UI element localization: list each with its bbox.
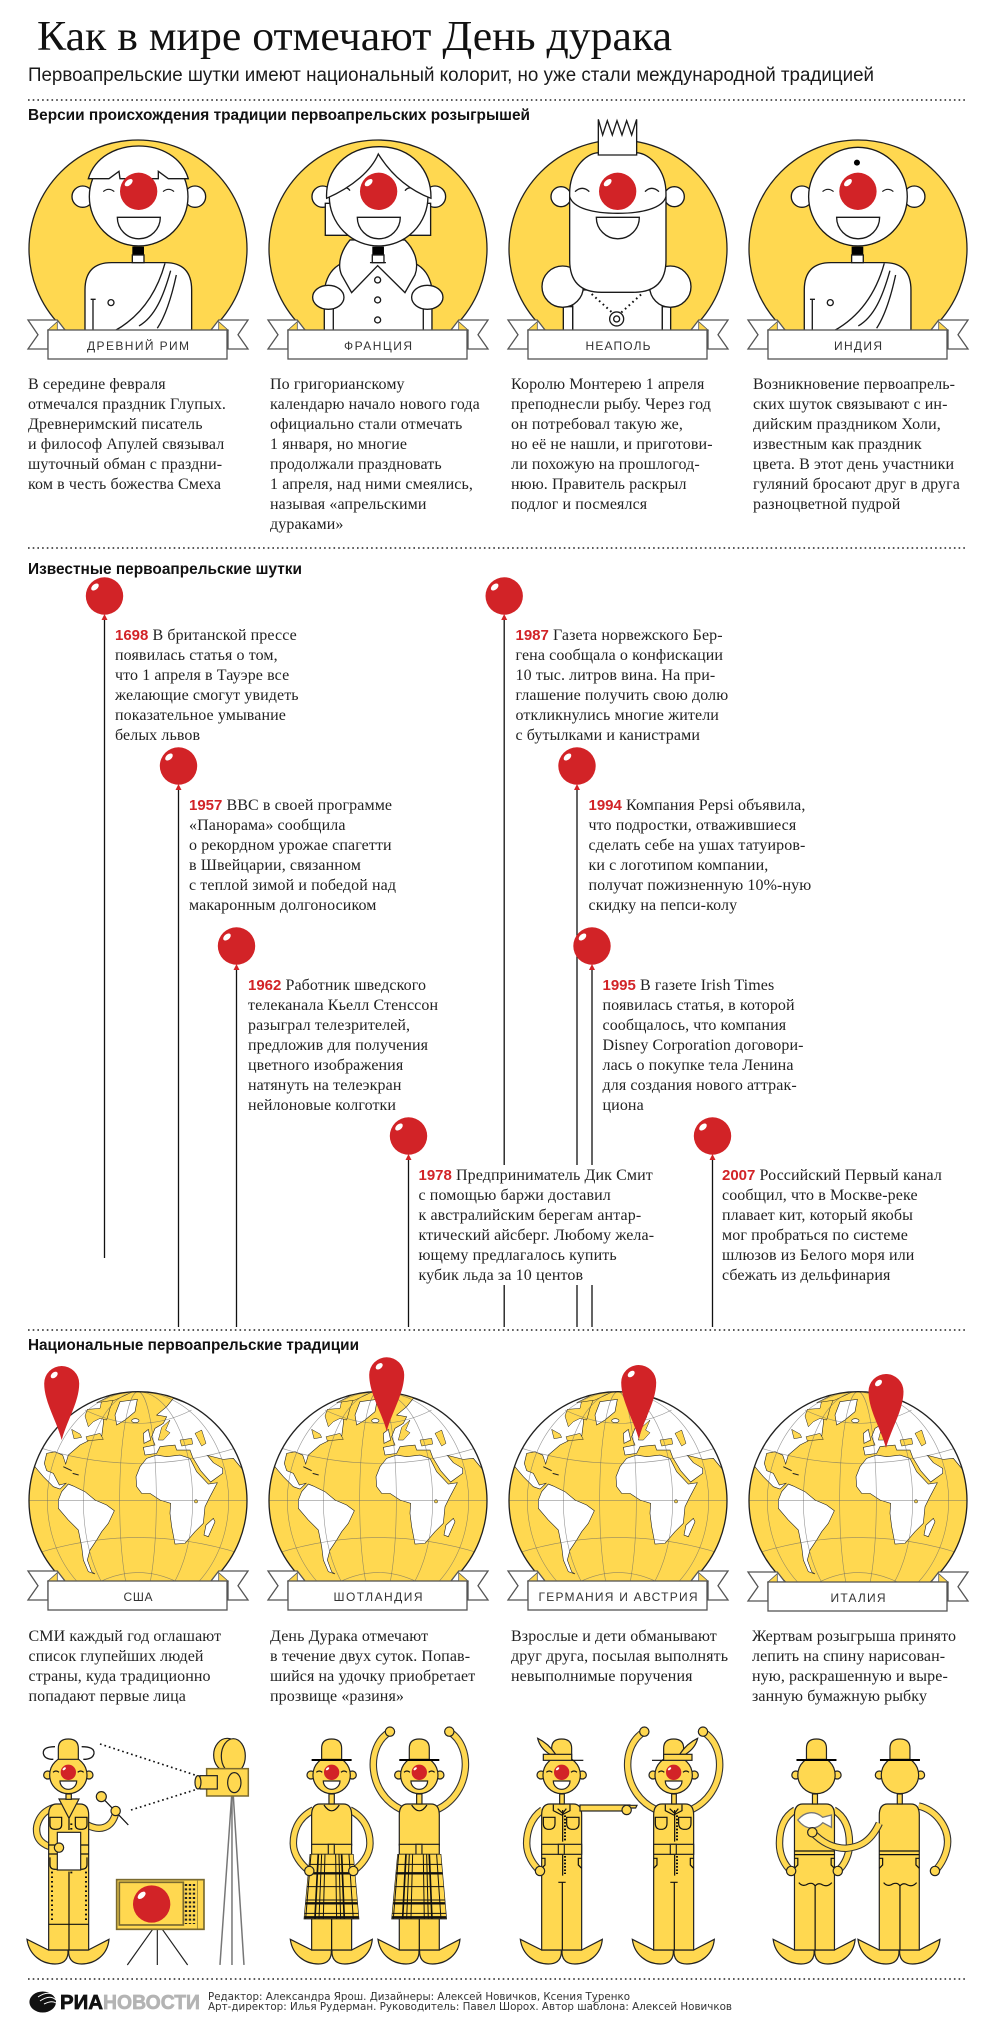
- joke text: 1995 В газете Irish Times: [602, 977, 774, 994]
- joke text: лась о покупке тела Ленина: [602, 1057, 794, 1074]
- joke text: белых львов: [115, 727, 200, 744]
- ribbon label: ШОТЛАНДИЯ: [334, 1590, 422, 1604]
- reporter: [27, 1739, 128, 1964]
- ribbon label: [268, 320, 488, 359]
- text block: Королю Монтерею 1 апреля: [511, 376, 705, 393]
- joke text: кубик льда за 10 центов: [418, 1267, 583, 1284]
- character: Italian prankster: [808, 1739, 948, 1964]
- ribbon label: [508, 320, 728, 359]
- joke text: циона: [602, 1097, 644, 1114]
- ribbon label: [748, 1572, 968, 1611]
- joke text: сообщалось, что компания: [602, 1017, 787, 1034]
- joke 1987: [486, 577, 728, 744]
- joke text: 10 тыс. литров вина. На при-: [516, 667, 715, 684]
- text block: и философ Апулей связывал: [28, 436, 224, 453]
- joke text: сообщил, что в Москве-реке: [722, 1187, 918, 1204]
- balloon: [486, 577, 523, 620]
- balloon: [694, 1117, 731, 1160]
- ribbon label: [508, 1571, 728, 1610]
- text block: друг друга, посылая выполнять: [511, 1648, 728, 1665]
- ribbon label: ГЕРМАНИЯ И АВСТРИЯ: [538, 1590, 698, 1604]
- joke text: Disney Corporation договори-: [602, 1037, 804, 1054]
- joke 1995: [573, 927, 804, 1114]
- joke text: 1698 В британской прессе: [115, 627, 297, 644]
- balloon: [558, 747, 596, 790]
- text block: подлог и посмеялся: [511, 496, 648, 513]
- panel: USA: [13, 1366, 267, 1705]
- joke text: о рекордном урожае спагетти: [189, 837, 392, 854]
- icon: France clown: [269, 140, 487, 358]
- panel: Scotland: [253, 1357, 507, 1705]
- ribbon label: США: [124, 1590, 152, 1604]
- joke text: глашение получить свою долю: [516, 687, 728, 704]
- joke text: откликнулись многие жители: [516, 707, 719, 724]
- logo: RIA Novosti: НОВОСТИ: [103, 1992, 200, 2014]
- globe with pin: [13, 1366, 267, 1610]
- balloon: [390, 1117, 427, 1160]
- panel: India: [748, 140, 968, 513]
- text block: шийся на удочку приобретает: [270, 1668, 475, 1685]
- text block: попадают первые лица: [28, 1688, 186, 1705]
- text block: лепить на спину нарисован-: [752, 1648, 945, 1665]
- joke 2007: [694, 1117, 942, 1284]
- globe with pin: [253, 1357, 507, 1610]
- joke text: 1987 Газета норвежского Бер-: [516, 627, 723, 644]
- ribbon label: [748, 320, 968, 359]
- illustration: reporter with TV and camera: [27, 1727, 465, 1965]
- text block: Жертвам розыгрыша принято: [752, 1628, 956, 1645]
- text block: он потребовал такую же,: [511, 416, 683, 433]
- text block: список глупейших людей: [28, 1648, 204, 1665]
- text block: Древнеримский писатель: [28, 416, 203, 433]
- icon: film camera: [195, 1738, 248, 1965]
- joke text: 1957 BBC в своей программе: [189, 797, 392, 814]
- text block: невыполнимые поручения: [511, 1668, 693, 1685]
- ribbon label: ФРАНЦИЯ: [344, 339, 412, 353]
- panel: France: [268, 140, 488, 533]
- icon: India clown: [749, 140, 967, 358]
- text block: календарю начало нового года: [270, 396, 480, 413]
- joke 1957: [160, 747, 396, 914]
- ribbon label: ДРЕВНИЙ РИМ: [87, 338, 189, 353]
- panel: Italy: [733, 1370, 987, 1705]
- joke text: 1962 Работник шведского: [248, 977, 426, 994]
- panel: Ancient Rome: [28, 140, 248, 493]
- joke text: предложив для получения: [248, 1037, 429, 1054]
- ribbon label: ИТАЛИЯ: [830, 1591, 886, 1605]
- joke 1962: [218, 927, 438, 1114]
- text block: ком в честь божества Смеха: [28, 476, 221, 493]
- balloon: [573, 927, 611, 970]
- icon: Naples clown: [509, 119, 727, 358]
- text block: нюю. Правитель раскрыл: [511, 476, 687, 493]
- text block: ную, раскрашенную и выре-: [752, 1668, 948, 1685]
- text block: занную бумажную рыбку: [752, 1688, 927, 1705]
- joke text: скидку на пепси-колу: [588, 897, 737, 914]
- joke text: цветного изображения: [248, 1057, 404, 1074]
- heading: origins: Версии происхождения традиции первоапрельских розыгрышей: [28, 107, 530, 124]
- joke text: телеканала Кьелл Стенссон: [248, 997, 438, 1014]
- ribbon label: [28, 1571, 248, 1610]
- text block: шуточный обман с праздни-: [28, 456, 222, 473]
- text block: но её не нашли, и приготови-: [511, 436, 713, 453]
- text block: в течение двух суток. Попав-: [270, 1648, 470, 1665]
- joke text: для создания нового аттрак-: [602, 1077, 797, 1094]
- ribbon label: [28, 320, 248, 359]
- text block: 1 апреля, над ними смеялись,: [270, 476, 473, 493]
- joke text: 2007 Российский Первый канал: [722, 1167, 942, 1184]
- text block: гуляний бросают друг в друга: [753, 476, 960, 493]
- heading: famous jokes: Известные первоапрельские шутки: [28, 561, 302, 578]
- joke text: с теплой зимой и победой над: [189, 877, 396, 894]
- joke text: ющему предлагалось купить: [418, 1247, 617, 1264]
- joke text: макаронным долгоносиком: [189, 897, 377, 914]
- text block: По григорианскому: [270, 376, 405, 393]
- joke text: что подростки, отважившиеся: [588, 817, 797, 834]
- joke text: 1994 Компания Pepsi объявила,: [588, 797, 805, 814]
- character: Scot with arms down: [290, 1739, 372, 1964]
- joke text: что 1 апреля в Тауэре все: [115, 667, 289, 684]
- title: Как в мире отмечают День дурака: [37, 14, 672, 60]
- joke text: плавает кит, который якобы: [722, 1207, 913, 1224]
- joke text: «Панорама» сообщила: [189, 817, 346, 834]
- globe with pin: [493, 1365, 747, 1610]
- joke text: появилась статья о том,: [115, 647, 278, 664]
- joke text: к австралийским берегам антар-: [418, 1207, 641, 1224]
- illustration: German and Italian characters: [520, 1727, 948, 1964]
- balloon: [160, 747, 197, 790]
- text block: дураками»: [270, 516, 343, 533]
- joke text: показательное умывание: [115, 707, 286, 724]
- text block: Взрослые и дети обманывают: [511, 1628, 717, 1645]
- icon: Rome clown: [29, 140, 247, 358]
- logo: RIA Novosti: [29, 1992, 200, 2014]
- credits: Арт-директор: Илья Рудерман. Руководитель: Павел Шорох. Автор шаблона: Алексей Новичков: [208, 2001, 732, 2013]
- joke 1978: [390, 1117, 654, 1284]
- joke text: гена сообщала о конфискации: [516, 647, 723, 664]
- ribbon label: [268, 1571, 488, 1610]
- text block: разноцветной пудрой: [753, 496, 901, 513]
- joke text: появилась статья, в которой: [602, 997, 795, 1014]
- text block: продолжали праздновать: [270, 456, 442, 473]
- joke text: мог пробраться по системе: [722, 1227, 908, 1244]
- text block: СМИ каждый год оглашают: [28, 1628, 221, 1645]
- joke text: ки с логотипом компании,: [588, 857, 768, 874]
- text block: страны, куда традиционно: [28, 1668, 211, 1685]
- joke text: в Швейцарии, связанном: [189, 857, 361, 874]
- heading: national traditions: Национальные первоапрельские традиции: [28, 1337, 359, 1354]
- joke text: желающие смогут увидеть: [114, 687, 299, 704]
- joke 1994: [558, 747, 811, 914]
- globe with pin: [733, 1370, 987, 1610]
- logo: RIA Novosti: РИА: [60, 1992, 103, 2014]
- text block: прозвище «разиня»: [270, 1688, 404, 1705]
- text block: День Дурака отмечают: [270, 1628, 428, 1645]
- character: Italian victim with paper fish: [773, 1739, 855, 1964]
- joke text: с бутылками и канистрами: [516, 727, 700, 744]
- text block: преподнесли рыбу. Через год: [511, 396, 711, 413]
- character: German with arms raised: [628, 1727, 720, 1964]
- text block: ли похожую на прошлогод-: [511, 456, 700, 473]
- ribbon label: ИНДИЯ: [834, 339, 882, 353]
- joke text: сделать себе на ушах татуиров-: [588, 837, 805, 854]
- text block: ских шуток связывают с ин-: [753, 396, 948, 413]
- text block: В середине февраля: [28, 376, 166, 393]
- joke 1698: [86, 577, 299, 744]
- ribbon label: НЕАПОЛЬ: [586, 339, 651, 353]
- arrow: dotted view lines: [100, 1744, 197, 1810]
- text block: 1 января, но многие: [270, 436, 407, 453]
- joke text: 1978 Предприниматель Дик Смит: [418, 1167, 653, 1184]
- joke text: сбежать из дельфинария: [722, 1267, 891, 1284]
- panel: Germany and Austria: [493, 1365, 747, 1685]
- text block: отмечался праздник Глупых.: [28, 396, 226, 413]
- text block: дийским праздником Холи,: [753, 416, 941, 433]
- text block: называя «апрельскими: [270, 496, 427, 513]
- balloon: [86, 577, 123, 620]
- text block: известным как праздник: [753, 436, 922, 453]
- joke text: получат пожизненную 10%-ную: [588, 877, 811, 894]
- timeline strings: [104, 620, 712, 1327]
- credits: Редактор: Александра Ярош. Дизайнеры: Алексей Новичков, Ксения Туренко: [208, 1991, 630, 2003]
- panel: Naples: [508, 119, 728, 513]
- subtitle: Первоапрельские шутки имеют национальный колорит, но уже стали международной традицией: [28, 65, 874, 86]
- joke text: шлюзов из Белого моря или: [722, 1247, 915, 1264]
- icon: television with red nose: [117, 1880, 204, 1965]
- joke text: с помощью баржи доставил: [418, 1187, 611, 1204]
- text block: официально стали отмечать: [270, 416, 462, 433]
- text block: Возникновение первоапрель-: [753, 376, 955, 393]
- joke text: натянуть на телеэкран: [248, 1077, 402, 1094]
- joke text: нейлоновые колготки: [248, 1097, 396, 1114]
- joke text: ктический айсберг. Любому жела-: [418, 1227, 654, 1244]
- character: Scot with arms raised: [373, 1727, 465, 1964]
- joke text: разыграл телезрителей,: [248, 1017, 410, 1034]
- character: German pointing: [520, 1738, 637, 1964]
- text block: цвета. В этот день участники: [753, 456, 954, 473]
- balloon: [218, 927, 255, 970]
